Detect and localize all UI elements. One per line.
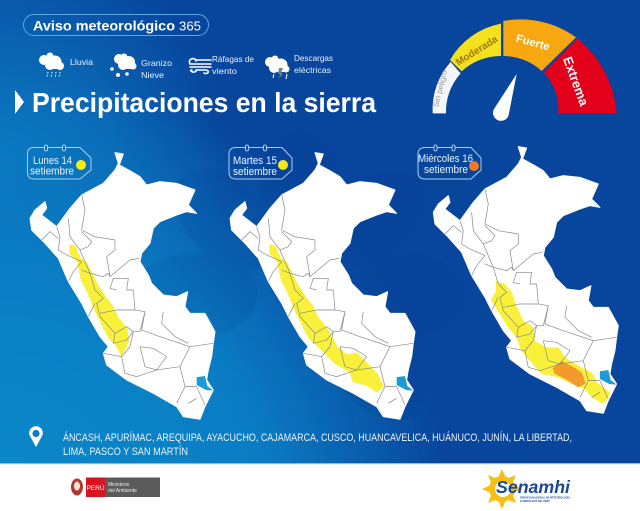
panel: miércoles 16: [418, 145, 618, 413]
icon: title arrow: [15, 90, 24, 114]
logo: Ministerio del Ambiente: [71, 478, 160, 497]
panel: martes 15: [229, 145, 415, 419]
logo: Senamhi: Senamhi: [496, 477, 571, 497]
regions list: [29, 426, 572, 458]
logo: Ministerio del Ambiente: Ministerio: [108, 482, 130, 488]
gauge segment: sin peligro: [431, 62, 461, 113]
gauge needle: [493, 74, 517, 121]
gauge segment: fuerte: [503, 19, 576, 71]
legend: granizo nieve: Granizo: [141, 58, 172, 68]
legend: lluvia: Lluvia: [70, 57, 93, 67]
legend: descargas eléctricas: [265, 53, 333, 79]
gauge segment: moderada: [450, 24, 501, 71]
gauge segment: sin peligro: Sin peligro: [431, 69, 449, 108]
icon: storm cloud: [265, 56, 290, 79]
legend: ráfagas de viento: Ráfagas de: [212, 54, 254, 64]
legend: lluvia: [39, 52, 93, 78]
legend: ráfagas de viento: viento: [212, 66, 237, 76]
date tag: miércoles: [418, 145, 481, 179]
date tag: martes: [229, 145, 292, 179]
icon: hail cloud: [110, 54, 136, 77]
icon: location pin: [29, 426, 43, 447]
map: Peru miércoles: [433, 147, 618, 413]
legend: descargas eléctricas: Descargas: [294, 53, 333, 63]
date tag: martes: Martes 15: [233, 155, 277, 167]
logo: Senamhi: E HIDROLOGÍA DEL PERÚ: [520, 498, 550, 503]
badge: Aviso meteorológico 365: Aviso meteorológico: [33, 18, 175, 34]
gauge segment: moderada: Moderada: [454, 34, 500, 68]
legend: granizo nieve: Nieve: [141, 70, 164, 80]
footer: [0, 463, 640, 511]
date tag: lunes: [28, 145, 91, 179]
date tag: lunes: setiembre: [30, 166, 74, 178]
date tag: miércoles: setiembre: [424, 164, 468, 176]
date tag: lunes: Lunes 14: [33, 155, 72, 167]
map: Peru martes: [230, 153, 415, 419]
logo: Ministerio del Ambiente: del Ambiente: [108, 488, 137, 494]
title: Precipitaciones en la sierra: [32, 87, 376, 118]
panel: lunes 14: [28, 145, 215, 419]
map: Peru lunes: [30, 153, 215, 419]
logo: Senamhi: [482, 469, 571, 509]
logo: Ministerio del Ambiente: PERÚ: [86, 483, 105, 492]
icon: rain cloud: [39, 52, 64, 78]
legend: ráfagas de viento: [189, 54, 254, 76]
regions list: LIMA, PASCO Y SAN MARTÍN: [63, 445, 188, 458]
date tag: martes: setiembre: [233, 166, 277, 178]
logo: Senamhi: SERVICIO NACIONAL DE METEOROLOGÍA: [520, 494, 571, 500]
icon: wind: [189, 59, 211, 74]
gauge segment: extrema: [544, 38, 617, 113]
badge: Aviso meteorológico 365: [24, 14, 208, 36]
gauge segment: fuerte: Fuerte: [514, 33, 551, 53]
gauge segment: extrema: Extrema: [560, 54, 592, 108]
legend: descargas eléctricas: eléctricas: [294, 65, 331, 75]
gauge: [431, 19, 617, 121]
badge: Aviso meteorológico 365: 365: [179, 20, 201, 34]
legend: granizo nieve: [110, 54, 172, 80]
date tag: miércoles: Miércoles 16: [418, 153, 473, 165]
